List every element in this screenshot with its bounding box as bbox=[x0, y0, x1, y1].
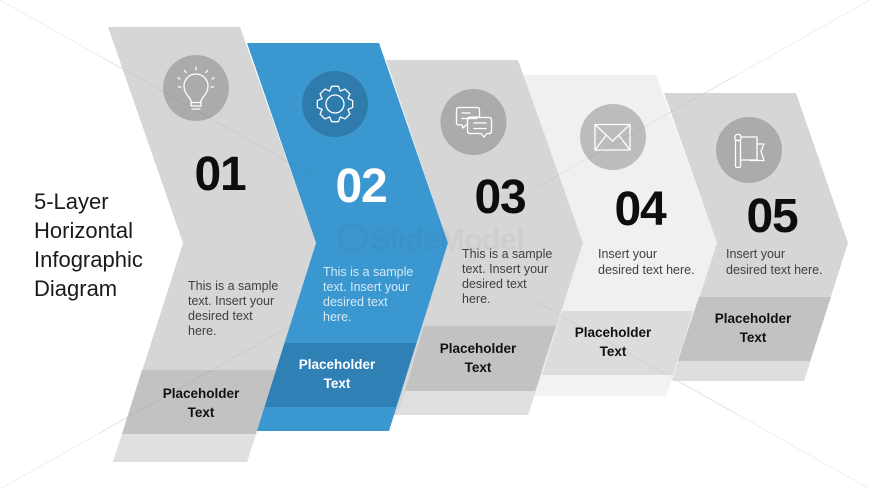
label 04: Text bbox=[600, 344, 627, 359]
icon: flag bbox=[735, 134, 764, 168]
watermark: SlideModel bbox=[370, 222, 524, 257]
body text 05: desired text here. bbox=[726, 263, 823, 277]
icon: envelope bbox=[595, 124, 630, 150]
icon circle 05 bbox=[716, 117, 782, 183]
body text 03: desired text bbox=[462, 277, 527, 291]
chevron 01 bbox=[108, 27, 316, 462]
label band 05 bbox=[678, 297, 831, 361]
label 05: Placeholder bbox=[715, 311, 792, 326]
panel: step 02 bbox=[247, 43, 524, 431]
label 03: Text bbox=[465, 360, 492, 375]
label band 03 bbox=[405, 326, 556, 391]
body text 03: here. bbox=[462, 292, 490, 306]
body text 02: here. bbox=[323, 310, 352, 324]
panel: step 04 bbox=[523, 75, 717, 396]
label 01: Placeholder bbox=[163, 386, 240, 401]
label 03: Placeholder bbox=[440, 341, 517, 356]
title: Infographic bbox=[34, 247, 143, 272]
icon circle 01 bbox=[163, 55, 229, 121]
label 02: Placeholder bbox=[299, 357, 376, 372]
lower strip 01 bbox=[113, 434, 256, 462]
label 05: Text bbox=[740, 330, 767, 345]
number 04: 04 bbox=[614, 183, 667, 236]
label 01: Text bbox=[188, 405, 215, 420]
body text 05: Insert your bbox=[726, 247, 785, 261]
title: Horizontal bbox=[34, 218, 133, 243]
lower strip 04 bbox=[535, 375, 673, 396]
number 03: 03 bbox=[474, 171, 526, 224]
body text 02: This is a sample bbox=[323, 265, 413, 279]
body text 01: text. Insert your bbox=[188, 294, 274, 308]
chevron 03 bbox=[386, 60, 583, 415]
label band 04 bbox=[542, 311, 693, 375]
body text 03: text. Insert your bbox=[462, 262, 548, 276]
icon: light bulb bbox=[178, 67, 214, 109]
body text 01: This is a sample bbox=[188, 279, 278, 293]
chevron 04 bbox=[523, 75, 717, 396]
title: 5-Layer bbox=[34, 189, 109, 214]
body text 02: text. Insert your bbox=[323, 280, 409, 294]
icon circle 04 bbox=[580, 104, 646, 170]
label 04: Placeholder bbox=[575, 325, 652, 340]
icon circle 02 bbox=[302, 71, 368, 137]
panel: step 03 bbox=[386, 60, 583, 415]
number 02: 02 bbox=[336, 160, 386, 213]
body text 01: here. bbox=[188, 324, 216, 338]
panel: step 05 bbox=[664, 93, 848, 381]
label band 02 bbox=[264, 343, 416, 407]
chevron 05 bbox=[664, 93, 848, 381]
icon: chat bubbles bbox=[456, 108, 492, 137]
body text 01: desired text bbox=[188, 309, 253, 323]
icon circle 03 bbox=[440, 89, 506, 155]
label band 01 bbox=[122, 370, 276, 434]
number 05: 05 bbox=[746, 190, 798, 243]
body text 03: This is a sample bbox=[462, 247, 552, 261]
chevron 02 bbox=[247, 43, 448, 431]
label 02: Text bbox=[324, 376, 351, 391]
body text 02: desired text bbox=[323, 295, 388, 309]
title: Diagram bbox=[34, 276, 117, 301]
body text 04: Insert your bbox=[598, 247, 657, 261]
lower strip 05 bbox=[672, 361, 810, 381]
body text 04: desired text here. bbox=[598, 263, 695, 277]
number 01: 01 bbox=[194, 148, 246, 201]
panel: step 01 bbox=[108, 27, 316, 462]
lower strip 03 bbox=[397, 391, 535, 415]
icon: gear bbox=[317, 86, 353, 122]
